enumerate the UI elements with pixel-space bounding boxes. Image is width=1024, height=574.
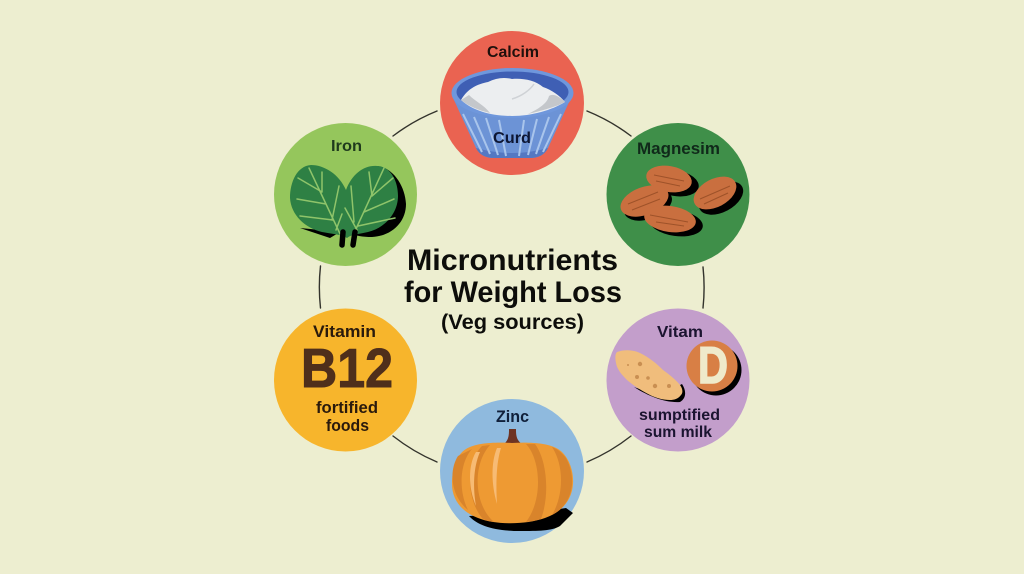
icon: almond slice — [615, 350, 685, 402]
label: Vitam: Vitam — [657, 324, 703, 341]
title — [404, 244, 622, 334]
panel: vitamin B12 — [274, 308, 417, 452]
label: B12: B12 — [301, 337, 393, 399]
title: for Weight Loss — [404, 276, 622, 309]
title: (Veg sources) — [441, 311, 584, 334]
label: sumptified sum milk: sumptified — [639, 407, 720, 424]
panel: vitamin D — [606, 308, 750, 452]
label: fortified foods — [316, 398, 378, 435]
label: fortified foods: foods — [326, 416, 369, 435]
label: Calcim: Calcim — [487, 44, 539, 61]
label: Curd: Curd — [493, 130, 531, 147]
label: Iron: Iron — [331, 138, 362, 155]
icon: spinach leaves — [290, 165, 406, 245]
label: Magnesim: Magnesim — [637, 139, 720, 158]
panel: calcium — [440, 31, 584, 175]
panel: iron — [274, 123, 417, 266]
label: Zinc: Zinc — [496, 407, 529, 426]
icon: D badge — [686, 337, 742, 396]
label: sumptified sum milk: sum milk — [644, 424, 712, 441]
icon: almonds — [616, 162, 749, 240]
panel: zinc — [440, 399, 584, 543]
label: Vitamin: Vitamin — [313, 322, 376, 341]
label: fortified foods: fortified — [316, 398, 378, 417]
icon: D badge: D — [698, 337, 728, 395]
label: sumptified sum milk — [639, 407, 720, 441]
icon: curd bowl — [452, 68, 574, 158]
title: Micronutrients — [407, 244, 618, 277]
panel: magnesium — [606, 123, 750, 266]
icon: pumpkin — [452, 429, 573, 531]
